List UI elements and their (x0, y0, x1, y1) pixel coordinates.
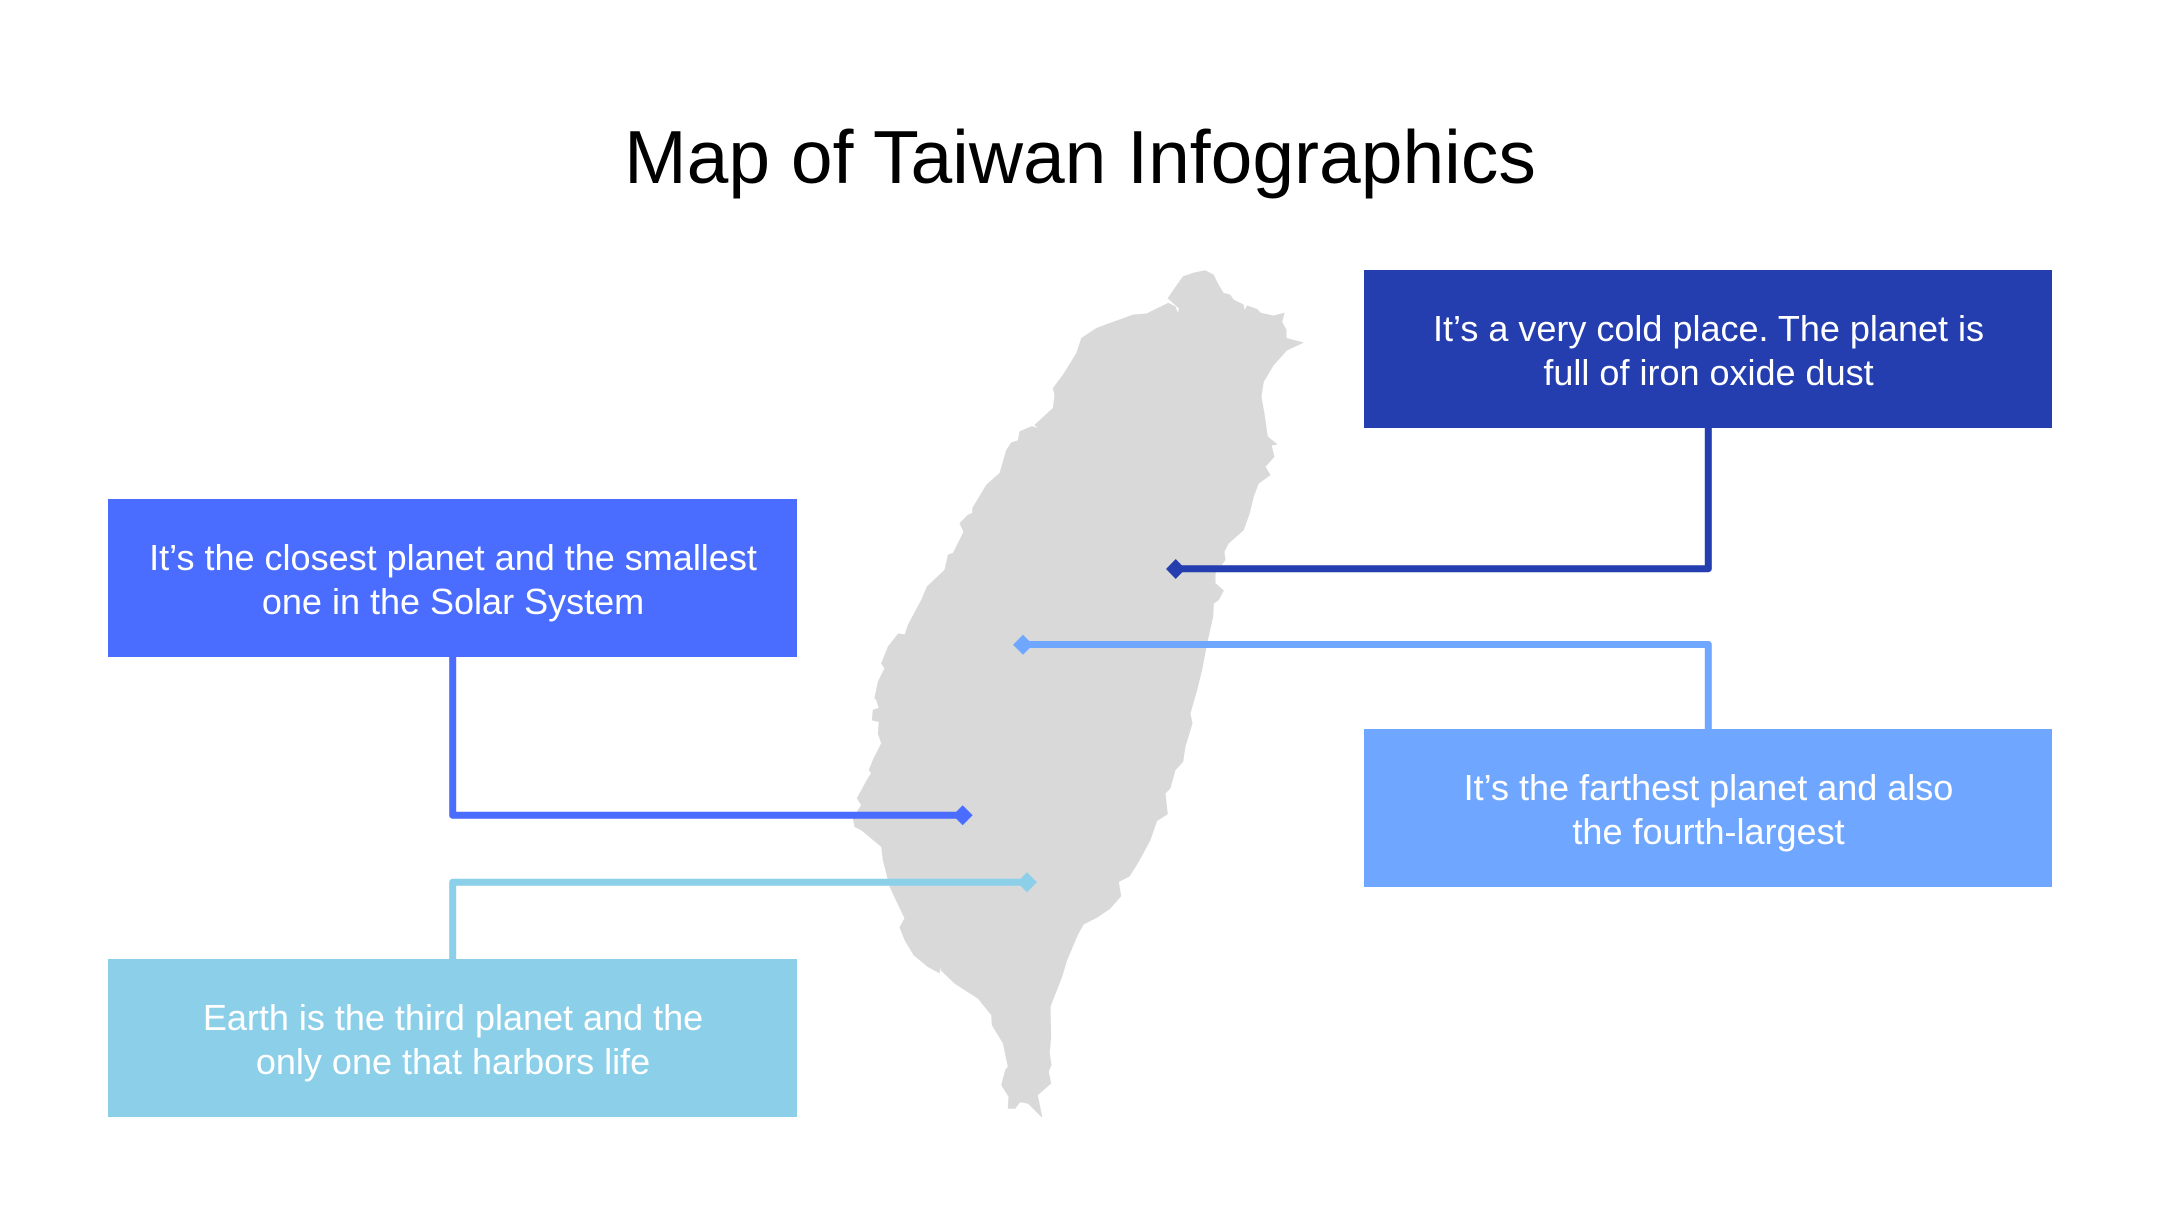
callout text (149, 536, 757, 622)
callout text (1464, 766, 1953, 852)
callout text: only one that harbors life (256, 1040, 650, 1082)
title: Map of Taiwan Infographics (624, 115, 1536, 199)
panel: light blue callout (1364, 729, 2052, 887)
callout text: It’s the farthest planet and also (1464, 766, 1953, 808)
panel: dark blue callout (1364, 270, 2052, 428)
connector: dark blue (1166, 427, 1708, 579)
callout text: one in the Solar System (262, 580, 644, 622)
callout text: the fourth-largest (1572, 810, 1845, 852)
callout text (1433, 308, 1984, 392)
map of Taiwan (853, 271, 1303, 1117)
callout text: It’s a very cold place. The planet is (1433, 308, 1984, 348)
connector: light blue (1013, 635, 1708, 730)
callout text (203, 996, 703, 1082)
callout text: full of iron oxide dust (1543, 352, 1874, 392)
callout text: Earth is the third planet and the (203, 996, 703, 1038)
connector: medium blue (453, 657, 973, 825)
callout text: It’s the closest planet and the smallest (149, 536, 757, 578)
panel: sky blue callout (108, 959, 797, 1117)
panel: medium blue callout (108, 499, 797, 657)
connector: sky blue (453, 872, 1037, 960)
